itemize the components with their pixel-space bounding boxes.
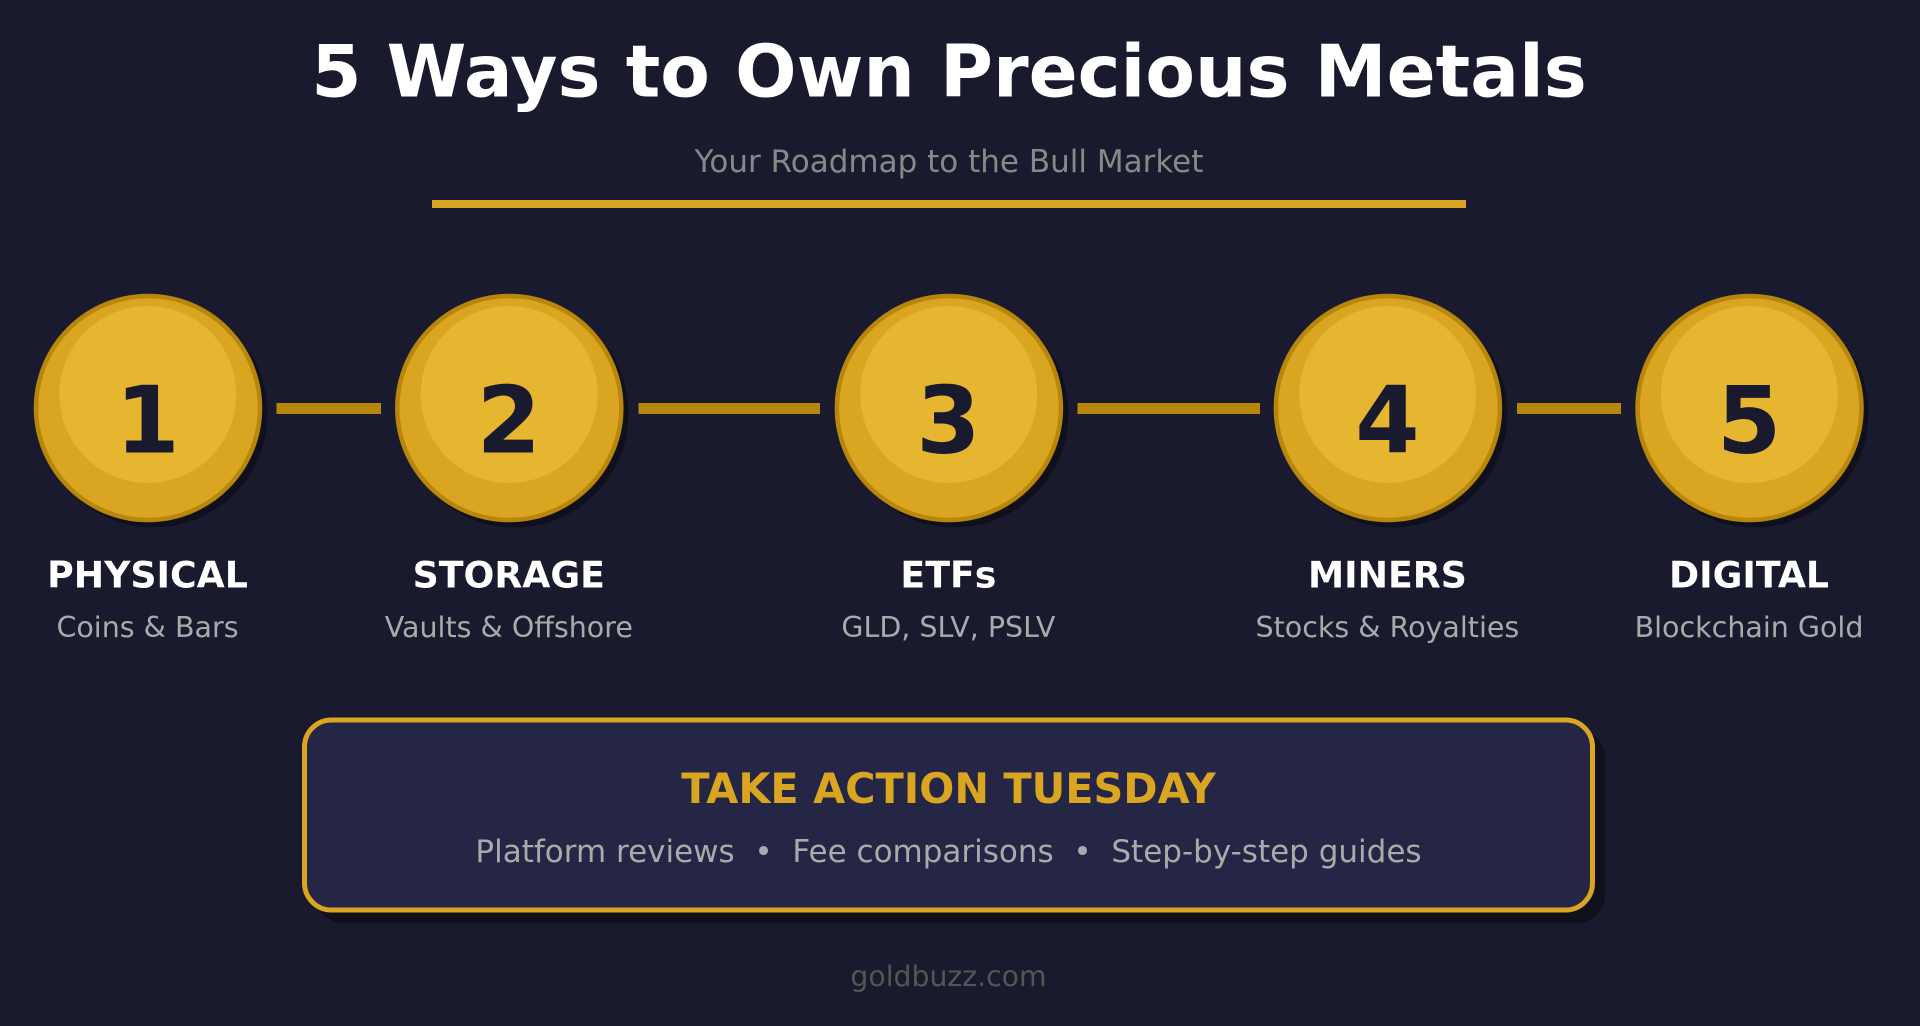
step 5: digital: Blockchain Gold — [1635, 611, 1863, 644]
footer: goldbuzz.com — [850, 960, 1047, 993]
step 3: ETFs: GLD, SLV, PSLV — [841, 611, 1056, 644]
step 5: digital — [1635, 296, 1868, 644]
connector 2-3 — [638, 403, 820, 414]
step 2: storage: 2 — [477, 366, 541, 474]
step 3: ETFs — [837, 296, 1068, 644]
step 5: digital: DIGITAL — [1669, 554, 1829, 596]
step 1: physical: Coins & Bars — [56, 611, 239, 644]
connector 1-2 — [276, 403, 381, 414]
step 4: miners — [1256, 296, 1519, 644]
call to action details: Platform reviews • Fee comparisons • Step-by-step guides — [475, 834, 1422, 870]
subtitle: Your Roadmap to the Bull Market — [694, 144, 1203, 180]
title underline — [432, 200, 1466, 208]
title: 5 Ways to Own Precious Metals — [311, 30, 1587, 114]
step 3: ETFs: 3 — [916, 366, 981, 474]
step 2: storage: STORAGE — [413, 554, 605, 596]
step 2: storage — [385, 296, 633, 644]
connector 3-4 — [1078, 403, 1260, 414]
step 3: ETFs: ETFs — [900, 554, 996, 596]
step 1: physical: 1 — [115, 366, 180, 474]
step 1: physical — [36, 296, 268, 644]
step 5: digital: 5 — [1717, 366, 1781, 474]
step 1: physical: PHYSICAL — [47, 554, 248, 596]
step 4: miners: Stocks & Royalties — [1256, 611, 1519, 644]
call to action heading: TAKE ACTION TUESDAY — [681, 765, 1217, 813]
call to action panel — [304, 720, 1605, 922]
step 4: miners: MINERS — [1308, 554, 1467, 596]
step 4: miners: 4 — [1355, 366, 1420, 474]
connector 4-5 — [1517, 403, 1621, 414]
step 2: storage: Vaults & Offshore — [385, 611, 633, 644]
